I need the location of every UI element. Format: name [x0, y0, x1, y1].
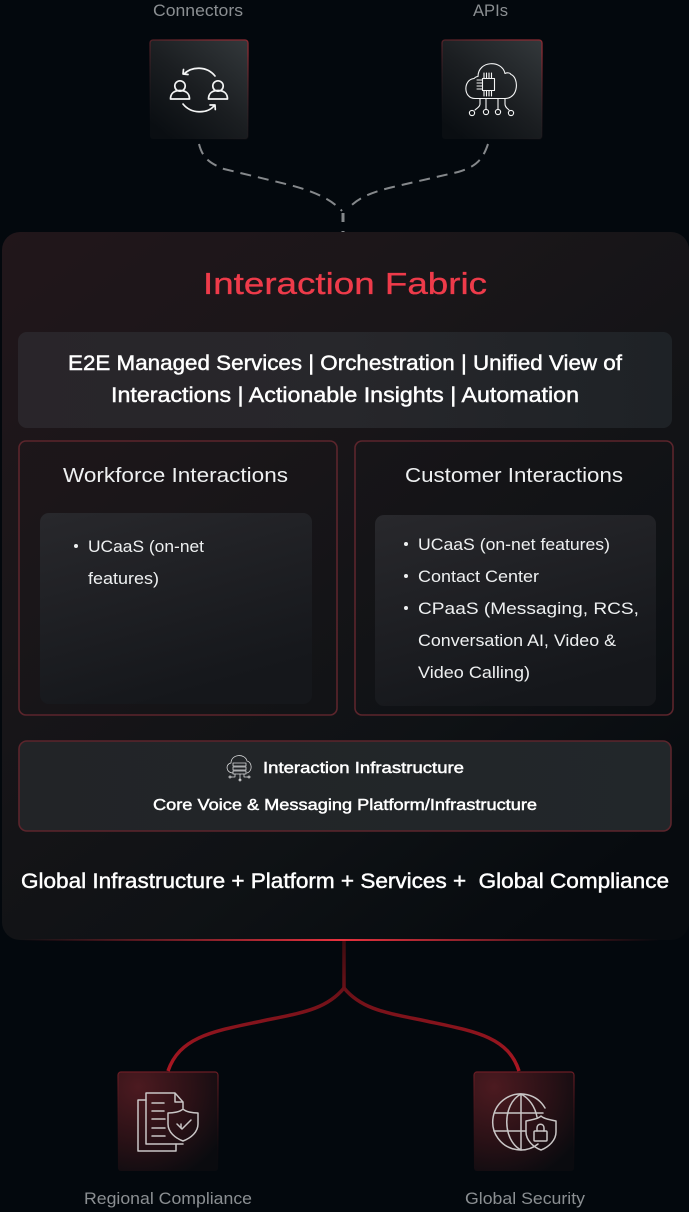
workforce list: features)	[88, 570, 159, 588]
panel: workforce interactions: Workforce Interactions	[63, 464, 288, 487]
icon: globe with shield lock	[493, 1094, 556, 1150]
title: Interaction Fabric	[203, 266, 487, 301]
label: Regional Compliance: Regional Compliance	[84, 1189, 252, 1208]
global security icon tile	[474, 1072, 574, 1171]
customer list: Conversation AI, Video &	[418, 632, 616, 650]
dashed connector arrows	[199, 144, 488, 233]
panel: interaction infrastructure: Interaction Infrastructure	[263, 760, 464, 777]
global summary line: Global Infrastructure + Platform + Services + Global Compliance	[21, 870, 669, 893]
panel: workforce interactions	[19, 441, 337, 715]
panel: customer interactions: Customer Interactions	[405, 464, 623, 487]
panel: interaction infrastructure: Core Voice & Messaging Platform/Infrastructure	[153, 797, 537, 814]
workforce list	[74, 538, 204, 588]
icon: people exchange	[170, 68, 228, 112]
label: APIs: APIs	[473, 1, 508, 20]
icon: cloud server	[227, 756, 251, 781]
regional compliance icon tile	[118, 1072, 218, 1171]
customer list: Video Calling)	[418, 664, 530, 682]
connectors icon tile	[150, 40, 248, 139]
services band	[18, 332, 672, 428]
panel: customer interactions	[355, 441, 673, 715]
panel: interaction fabric	[2, 232, 689, 941]
services band: Interactions | Actionable Insights | Automation	[111, 384, 579, 407]
customer list	[404, 536, 639, 682]
icon: cloud chip	[466, 64, 516, 116]
panel: interaction infrastructure	[19, 741, 671, 831]
red connector lines	[168, 941, 519, 1071]
APIs icon tile	[442, 40, 542, 139]
label: Global Security: Global Security	[465, 1189, 586, 1208]
label: Connectors: Connectors	[153, 1, 243, 20]
icon: documents with shield	[138, 1093, 198, 1151]
services band: E2E Managed Services | Orchestration | Unified View of	[68, 352, 622, 375]
customer list: UCaaS (on-net features)	[418, 536, 610, 554]
customer list: Contact Center	[418, 568, 540, 586]
workforce list: UCaaS (on-net	[88, 538, 204, 556]
customer list: CPaaS (Messaging, RCS,	[418, 600, 639, 618]
